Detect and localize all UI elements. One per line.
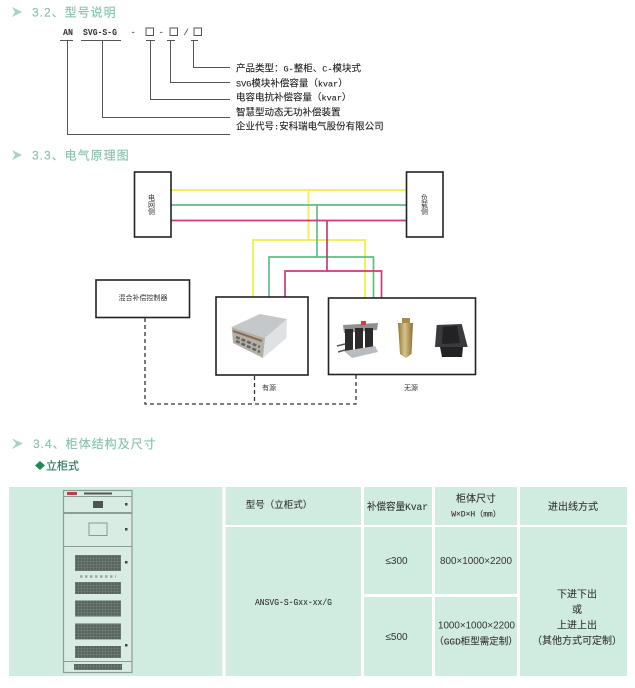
leader lines [60,40,230,134]
wiring method cell: 上进上出 [557,618,597,632]
wiring method cell [520,527,627,676]
load side box: 负 [421,193,428,202]
three phase wires [171,190,406,298]
icon: capacitor [398,318,413,358]
dimension cells: 800×1000×2200 [440,556,512,567]
model code diagram [60,28,384,134]
model code string: AN [63,28,73,38]
model code string: / [184,28,189,38]
grid side box [134,172,171,237]
load side box [406,172,443,237]
code legend labels: 智慧型动态无功补偿装置 [236,106,341,118]
cabinet dimensions table [9,487,627,676]
model code string: - [130,28,136,38]
model code string: SVG-S-G [83,28,117,38]
dimension cells: 1000×1000×2200 [438,620,515,632]
wiring method cell: 或 [572,604,582,617]
control dashed lines [145,318,356,404]
code legend labels [236,62,384,132]
subheading: floor standing cabinet [35,458,79,472]
capacity cells: ≤300 [385,556,408,567]
load side box: 侧 [421,207,428,216]
passive compensation panel [328,298,476,392]
label: active: 有源 [262,383,276,392]
model code string: - [158,28,164,38]
code legend labels: 企业代号:安科瑞电气股份有限公司 [236,120,384,132]
subheading: floor standing cabinet: 立柜式 [46,458,79,472]
icon: reactor [337,321,378,358]
wiring method cell: 下进下出 [557,588,597,602]
dimension cells [434,527,518,676]
grid side box: 侧 [148,207,155,216]
model cell [226,527,361,676]
icon: SVG module [232,314,287,358]
electrical schematic diagram [96,172,476,404]
model cell: ANSVG-S-Gxx-xx/G [255,597,332,608]
label: passive: 无源 [404,383,418,392]
icon: controller device [435,324,468,357]
cabinet drawing cell [9,487,222,676]
cabinet drawing [64,490,132,672]
model code string [63,28,202,38]
capacity cells: ≤500 [385,632,408,643]
capacity cells [364,527,432,676]
code legend labels: 产品类型：G-整柜、C-模块式 [236,62,361,74]
hybrid compensation controller box [96,280,190,318]
table header row [226,487,627,525]
wiring method cell: （其他方式可定制） [532,634,622,648]
table header row: 型号（立柜式） [246,499,312,511]
grid side box: 电 [148,193,155,202]
table header row: 柜体尺寸 [456,492,496,506]
code legend labels: SVG模块补偿容量（kvar） [236,78,348,90]
table header row: 补偿容量Kvar [367,500,428,514]
active compensation panel [216,297,308,392]
table header row: 进出线方式 [548,500,598,514]
hybrid compensation controller box: 混合补偿控制器 [118,293,168,302]
heading: 3.2 model description: 3.2、型号说明 [32,4,117,20]
heading: 3.3 electrical schematic: 3.3、电气原理图 [32,148,130,162]
table header row: W×D×H（mm） [451,510,501,520]
grid side box: 网 [148,201,155,209]
load side box: 载 [421,200,428,209]
heading: 3.4 cabinet structure and dimensions: 3.4、柜体结构及尺寸 [33,436,157,451]
dimension cells: （GGD柜型需定制） [434,636,518,648]
code legend labels: 电容电抗补偿容量（kvar） [236,92,351,104]
